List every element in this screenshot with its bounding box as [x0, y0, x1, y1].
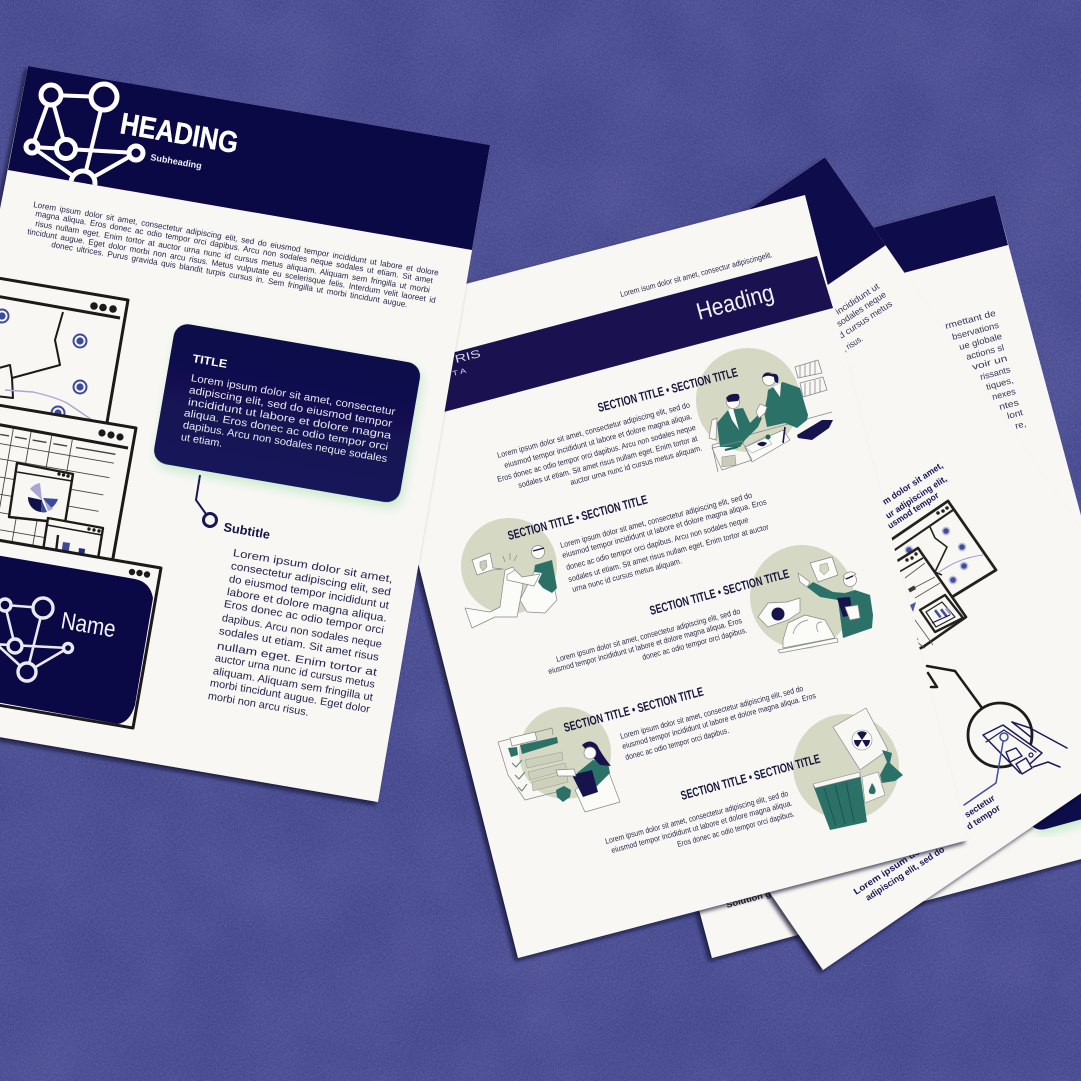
- name label: Name: [59, 607, 118, 643]
- subtitle body text: [207, 547, 394, 719]
- page: front sheet with sections: [355, 195, 968, 958]
- subtitle body text: auctor urna nunc id cursus metus: [214, 652, 376, 691]
- illustration: seated person: [461, 518, 557, 628]
- section 4: eiusmod tempor incididunt ut labore et dolore magna aliqua. Eros: [621, 691, 817, 751]
- band logo text: RIS: [454, 348, 482, 366]
- back sheet text column: actions sl: [965, 342, 1005, 362]
- middle sheet paragraph fragments: , risus.: [841, 333, 865, 354]
- back sheet text column: ntes: [998, 397, 1021, 412]
- window illustrations: [0, 275, 161, 728]
- subheading: Subheading: [150, 152, 203, 171]
- page: left sheet: [0, 66, 490, 802]
- back sheet text column: re,: [1014, 418, 1027, 431]
- callout card: [152, 322, 422, 504]
- subtitle body text: Lorem ipsum dolor sit amet,: [232, 547, 394, 586]
- subtitle body text: aliquam. Aliquam sem fringilla ut: [212, 665, 374, 704]
- intro paragraph: magna aliqua. Eros donec ac odio tempor orci dapibus. Arcu non sodales neque sodales ut etiam. Sit amet: [35, 209, 434, 285]
- man: [717, 408, 762, 447]
- middle sheet bar window: [920, 595, 963, 632]
- section 3: donec ac odio tempor orci dapibus.: [641, 626, 748, 662]
- back sheet text column: bservations: [951, 320, 1000, 342]
- subtitle body text: dapibus. Arcu non sodales neque: [221, 612, 383, 651]
- card title: TITLE: [191, 353, 228, 371]
- subtitle body text: morbi tincidunt augue. Eget dolor: [209, 677, 371, 716]
- logo: network nodes: [26, 84, 143, 195]
- illustration: hazardous waste: [793, 708, 903, 830]
- section 1: Eros donec ac odio tempor orci dapibus. Arcu non sodales neque: [496, 423, 697, 484]
- bottom bold caption: adipiscing elit, sed do: [864, 844, 947, 903]
- subtitle body text: Eros donec ac odio tempor orci: [223, 598, 385, 637]
- section 2: eiusmod tempor incididunt ut labore et dolore magna aliqua. Eros: [561, 497, 768, 560]
- section 2: donec ac odio tempor orci dapibus. Arcu non sodales neque: [565, 515, 750, 572]
- section 1: [496, 365, 739, 490]
- subtitle: Subtitle: [222, 520, 271, 542]
- window: map: [0, 276, 130, 422]
- middle sheet bold text: ur adipiscing elit,: [884, 474, 949, 521]
- band logo text: T A: [452, 368, 467, 378]
- subtitle body text: labore et dolore magna aliqua.: [226, 586, 388, 625]
- window: pie chart: [9, 463, 73, 523]
- section 4: Lorem ipsum dolor sit amet, consectetur adipiscing elit, sed do: [619, 684, 805, 741]
- connector line: [196, 475, 216, 526]
- middle sheet paragraph fragments: incididunt ut: [834, 281, 882, 317]
- intro paragraph: risus nullam eget. Enim tortor at auctor urna nunc id cursus metus aliquam. Aliquam sem fringilla ut morbi: [35, 219, 431, 295]
- section 3: Lorem ipsum dolor sit amet, consectetur adipiscing elit, sed do: [555, 607, 742, 664]
- subtitle body text: sodales ut etiam. Sit amet risus: [218, 625, 380, 664]
- card text: Lorem ipsum dolor sit amet, consectetur: [190, 373, 397, 418]
- window: name card: [0, 537, 161, 728]
- section 1: eiusmod tempor incididunt ut labore et dolore magna aliqua.: [503, 412, 693, 470]
- header band: [8, 66, 490, 250]
- logo: small network: [0, 598, 72, 681]
- page: back sheet: [694, 195, 1081, 963]
- illustration: safety gear and worker: [750, 545, 873, 653]
- section 4: donec ac odio tempor orci dapibus.: [624, 726, 730, 762]
- section 4: SECTION TITLE • SECTION TITLE: [562, 685, 705, 735]
- section 1: SECTION TITLE • SECTION TITLE: [596, 365, 739, 415]
- section 2: sodales ut etiam. Sit amet risus nullam eget. Enim tortor at auctor: [567, 522, 770, 584]
- section 5: Eros donec ac odio tempor orci dapibus.: [676, 809, 795, 849]
- section 1: auctor urna nunc id cursus metus aliquam.: [569, 443, 703, 487]
- section 5: Lorem ipsum dolor sit amet, consectetur adipiscing elit, sed do: [604, 789, 790, 846]
- section 3: eiusmod tempor incididunt ut labore et dolore magna aliqua. Eros: [547, 616, 743, 676]
- subtitle body text: morbi non arcu risus.: [207, 690, 310, 719]
- heading: HEADING: [118, 107, 241, 160]
- band logo text: [452, 348, 482, 378]
- section 5: [604, 752, 822, 855]
- woman: [764, 382, 808, 428]
- band heading: Heading: [694, 279, 777, 326]
- middle sheet bold text: [881, 460, 949, 531]
- connector and hand illustration: [927, 666, 1067, 805]
- back sheet text column: lont: [1006, 407, 1025, 421]
- middle sheet map window: [892, 500, 998, 650]
- back sheet text column: rissants: [979, 364, 1012, 382]
- window: bar chart: [42, 516, 104, 556]
- back sheet text column: nexes: [991, 386, 1017, 402]
- subtitle body text: consectetur adipiscing elit, sed: [230, 560, 392, 599]
- back sheet text column: [944, 308, 1027, 431]
- middle sheet paragraph fragments: [834, 281, 895, 354]
- section 3: [547, 567, 791, 676]
- card text: ut etiam.: [180, 432, 223, 450]
- back sheet text column: rmettant de: [944, 308, 997, 331]
- middle sheet bold text: usmod tempor: [886, 490, 941, 531]
- top line of text: Lorem isum dolor sit amet, consectur adipiscingelit.: [619, 250, 773, 299]
- middle sheet table window: [897, 546, 968, 650]
- intro paragraph: Lorem ipsum dolor sit amet, consectetur adipiscing elit, sed do eiusmod tempor incididunt ut labore et dolore: [33, 200, 440, 278]
- section 5: SECTION TITLE • SECTION TITLE: [679, 752, 822, 803]
- section 4: [562, 684, 817, 762]
- page: middle sheet: [742, 157, 1081, 975]
- middle sheet header band: [748, 157, 886, 285]
- illustration: office meeting: [696, 348, 833, 472]
- middle sheet paragraph fragments: sodales neque: [835, 289, 888, 329]
- card text: dapibus. Arcu non sodales neque sodales: [182, 420, 388, 465]
- window: table: [0, 402, 136, 575]
- middle sheet paragraph fragments: d cursus metus: [837, 298, 895, 341]
- section 1: sodales ut etiam. Sit amet risus nullam eget. Enim tortor at: [517, 434, 699, 490]
- heading band: [425, 256, 833, 413]
- section 2: Lorem ipsum dolor sit amet, consectetur adipiscing elit, sed do: [559, 491, 753, 550]
- intro paragraph: donec ultrices. Purus gravida quis blandit turpis cursus in. Sem fringilla ut morbi tincidunt augue.: [51, 240, 408, 309]
- hand caption: d tempor: [965, 802, 1002, 832]
- section 1: Lorem ipsum dolor sit amet, consectetur adipiscing elit, sed do: [496, 400, 691, 460]
- intro paragraph: tincidunt augue. Eget dolor morbi non arcu risus. Metus vulputate eu scelerisque felis. Interdum velit laoreet id: [27, 227, 437, 305]
- bottom bold caption: Lorem ipsum dolor: [852, 839, 933, 897]
- section 2: [506, 491, 770, 594]
- back sheet cut-off line: Solution g: [725, 888, 772, 910]
- section 5: eiusmod tempor incididunt ut labore et dolore magna aliqua.: [610, 798, 793, 855]
- back sheet text column: voir un: [971, 353, 1008, 372]
- card text: adipiscing elit, sed do eiusmod tempor: [188, 385, 394, 430]
- illustration: checklist and woman: [498, 707, 620, 812]
- hand caption: sectetur: [963, 793, 997, 820]
- card text: incididunt ut labore et dolore magna: [187, 397, 392, 442]
- back sheet text column: ue globale: [958, 331, 1003, 352]
- middle sheet bold text: m dolor sit amet,: [881, 460, 945, 507]
- dark card corner: [1030, 793, 1081, 838]
- card text: [180, 373, 397, 465]
- section 2: urna nunc id cursus metus aliquam.: [571, 556, 683, 594]
- back sheet text column: tiques,: [985, 375, 1015, 392]
- section 2: SECTION TITLE • SECTION TITLE: [506, 493, 649, 543]
- subtitle body text: do eiusmod tempor incididunt ut: [228, 573, 390, 612]
- subtitle body text: nullam eget. Enim tortor at: [216, 640, 378, 679]
- section 3: SECTION TITLE • SECTION TITLE: [648, 567, 791, 618]
- card text: aliqua. Eros donec ac odio tempor orci: [183, 408, 389, 453]
